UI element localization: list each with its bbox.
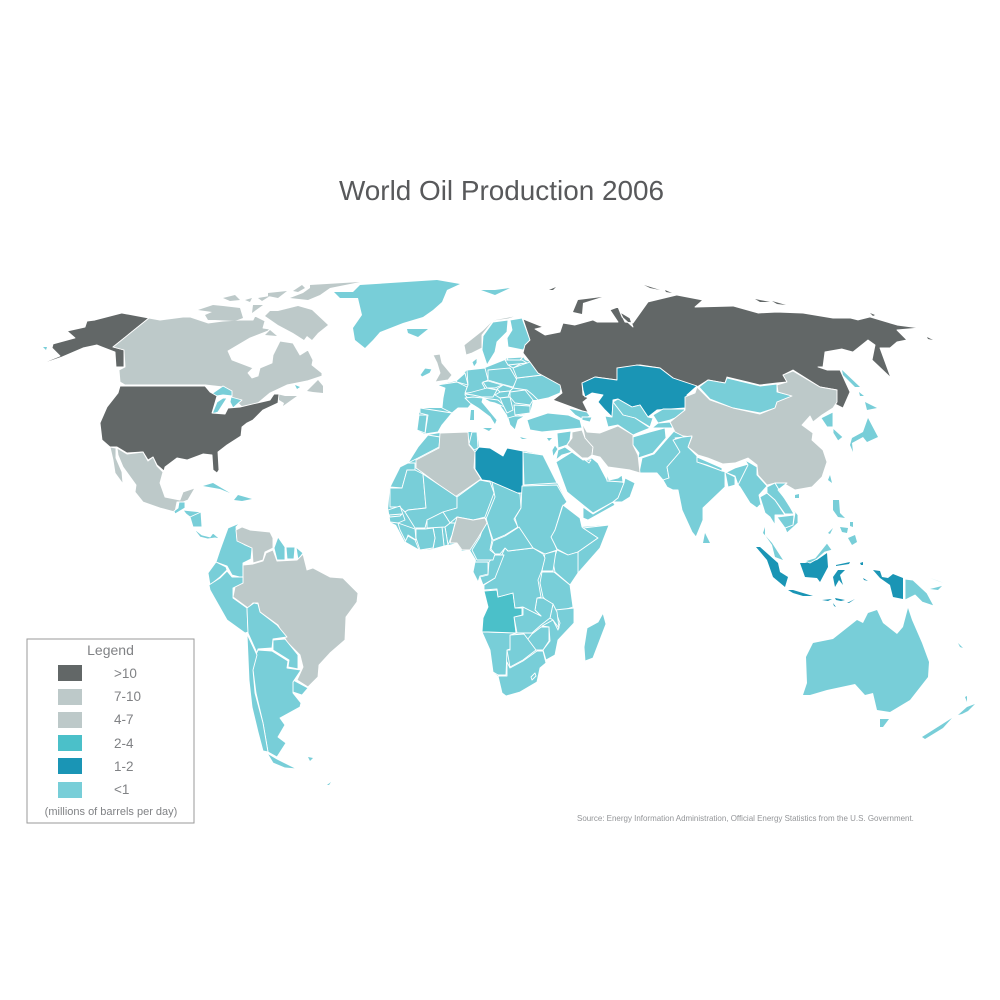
legend heading: Legend [87, 642, 134, 658]
country: Alaska [33, 313, 149, 367]
Philippines [828, 500, 857, 545]
legend [27, 639, 194, 823]
legend entry: above 10 [58, 665, 137, 681]
Great Lakes [210, 385, 300, 414]
map region: South America [208, 523, 358, 785]
country: Russia [523, 295, 920, 414]
map region: South and East Asia [663, 370, 903, 607]
country: Madagascar [584, 613, 606, 661]
country: Ecuador [208, 562, 227, 585]
country: Japan [842, 370, 878, 452]
legend entry: 1 to 2 [58, 758, 134, 774]
country: Finland [507, 318, 530, 350]
country: Sweden [482, 320, 508, 365]
country: Iraq [567, 430, 593, 458]
legend entry: above 10: >10 [114, 666, 137, 681]
country: Argentina [253, 650, 301, 757]
legend box [27, 639, 194, 823]
legend entry: 2 to 4 [58, 735, 134, 751]
legend entry: below 1: <1 [114, 782, 129, 797]
legend entry: 7 to 10 [58, 689, 141, 705]
New Zealand and Pacific islands [922, 643, 975, 739]
map region: Europe [417, 315, 562, 441]
country: DR Congo [484, 548, 545, 616]
country: Turkey [527, 413, 582, 432]
legend entry: 4 to 7: 4-7 [114, 712, 134, 727]
legend entry: 7 to 10: 7-10 [114, 689, 141, 704]
Central America [174, 483, 252, 539]
country: Canada [113, 316, 322, 407]
country: Kazakhstan [582, 365, 697, 417]
country: Venezuela [236, 527, 273, 563]
Guianas [274, 537, 303, 560]
country: Indonesia [756, 547, 903, 607]
country: Bolivia [247, 603, 287, 653]
Canada: arctic islands [198, 282, 360, 406]
country: India [663, 436, 752, 537]
country: Saudi Arabia [556, 452, 624, 513]
country: Mexico [117, 448, 195, 512]
country: Nigeria [450, 517, 487, 550]
country: Australia [803, 608, 929, 712]
country: Libya [475, 447, 523, 493]
map region: Oceania [803, 578, 975, 739]
map region: North America [33, 282, 360, 539]
country: Norway [464, 315, 520, 355]
country: Brazil [233, 550, 358, 687]
country: Egypt [523, 452, 557, 485]
map region: Greenland and Iceland [334, 280, 510, 348]
country: United Kingdom [433, 354, 452, 382]
country: Angola [482, 590, 522, 633]
legend units note: (millions of barrels per day) [45, 806, 177, 818]
legend entry: 4 to 7 [58, 712, 134, 728]
title: World Oil Production 2006 [339, 175, 664, 206]
legend entry: 2 to 4: 2-4 [114, 736, 134, 751]
country: Peru [209, 571, 248, 633]
map region: Middle East [527, 413, 640, 520]
country: Paraguay [273, 639, 298, 669]
country: Algeria [416, 432, 481, 497]
country: Iceland [407, 329, 428, 337]
country: Colombia [216, 523, 252, 577]
Central Asian states [568, 399, 685, 480]
country: Thailand [760, 493, 785, 525]
country: Papua New Guinea [905, 579, 934, 606]
country: United States [100, 386, 279, 473]
country: Mongolia [699, 378, 792, 413]
country: Uruguay [293, 680, 308, 695]
country: Iran [582, 423, 640, 473]
country: Greenland [334, 280, 460, 348]
country: Italy [465, 397, 497, 425]
country: Chile [247, 634, 268, 752]
map region: Africa [388, 432, 609, 696]
legend entry: below 1 [58, 782, 129, 798]
country: China [670, 371, 837, 490]
country: Myanmar [738, 460, 767, 527]
legend entry: 1 to 2: 1-2 [114, 759, 134, 774]
source note: Source: Energy Information Administration, Official Energy Statistics from the U.S. Government. [577, 814, 914, 823]
map region: Russia and Central Asia [523, 285, 933, 480]
